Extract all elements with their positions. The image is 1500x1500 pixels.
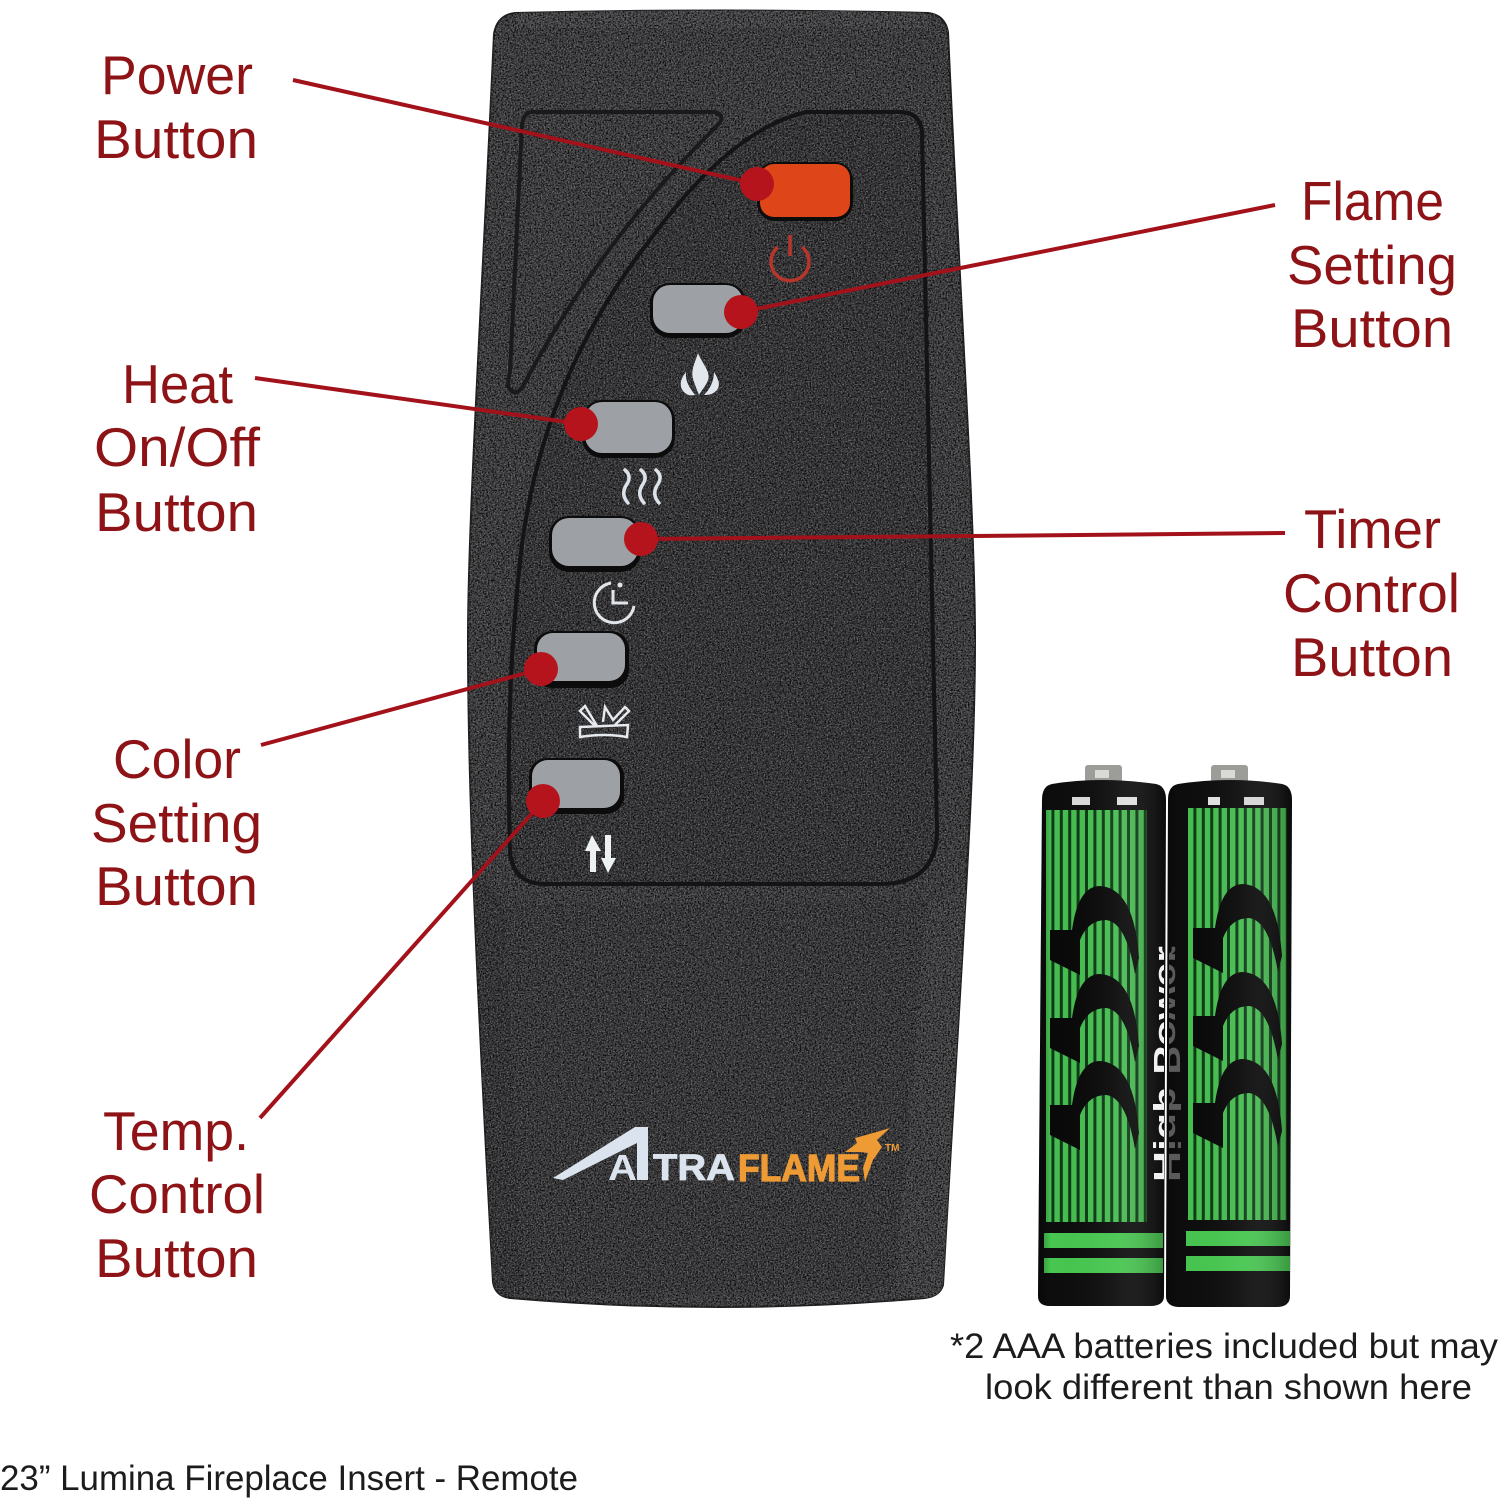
- callout: timer control button: [624, 498, 1460, 688]
- callout: temp control button: Control: [89, 1163, 265, 1225]
- callout: color setting button: [91, 652, 558, 917]
- callout: power button: Button: [94, 108, 258, 170]
- icon: timer clock: [594, 583, 634, 623]
- groove: triangular recess: [508, 112, 721, 393]
- callout: temp control button: Temp.: [103, 1100, 249, 1162]
- button: temp control: [529, 758, 624, 814]
- battery: left: High Power: [1147, 946, 1182, 1182]
- callout: timer control button: Button: [1291, 626, 1453, 688]
- button: heat on/off: [582, 400, 675, 458]
- callout: flame setting button: Setting: [1287, 234, 1457, 296]
- callout: color setting button: Color: [113, 728, 241, 790]
- battery note: [950, 1327, 1499, 1407]
- button: power: [757, 162, 853, 221]
- logo: AltraFlame: TRA: [653, 1147, 735, 1188]
- callout: temp control button: [89, 784, 560, 1289]
- icon: flame: [681, 353, 719, 395]
- callout: color setting button: Button: [95, 855, 258, 917]
- logo: AltraFlame: FLAME: [738, 1148, 860, 1190]
- callout: heat on/off button: Heat: [122, 353, 233, 415]
- callout: temp control button: Button: [95, 1227, 258, 1289]
- callout: color setting button: Setting: [91, 792, 262, 854]
- button: color setting: [534, 631, 629, 688]
- battery: right: High Power: [1152, 946, 1187, 1182]
- button panel outline: [509, 112, 937, 884]
- battery note: *2 AAA batteries included but may: [950, 1327, 1499, 1366]
- callout: power button: Power: [101, 44, 253, 106]
- callout: flame setting button: [724, 170, 1457, 359]
- battery: left: [1038, 765, 1166, 1306]
- logo: AltraFlame: [553, 1127, 899, 1190]
- logo: AltraFlame: TM: [885, 1143, 899, 1154]
- callout: heat on/off button: [94, 353, 598, 543]
- callout: timer control button: Control: [1283, 562, 1460, 624]
- callout: heat on/off button: On/Off: [94, 416, 261, 478]
- icon: heat waves: [624, 470, 660, 503]
- icon: up/down arrows: [585, 835, 616, 873]
- icon: color crown: [580, 706, 629, 737]
- callout: power button: [94, 44, 774, 201]
- callout: timer control button: Timer: [1304, 498, 1441, 560]
- logo: AltraFlame: A: [608, 1147, 637, 1188]
- callout: flame setting button: Flame: [1301, 170, 1444, 232]
- callout: heat on/off button: Button: [95, 481, 258, 543]
- battery note: look different than shown here: [985, 1368, 1472, 1407]
- caption: 23” Lumina Fireplace Insert - Remote: [0, 1459, 578, 1498]
- button: flame setting: [650, 283, 746, 338]
- icon: power: [771, 235, 809, 281]
- callout: flame setting button: Button: [1291, 297, 1453, 359]
- battery: right: [1152, 765, 1292, 1307]
- remote control body: [460, 0, 980, 1320]
- button: timer control: [549, 516, 641, 572]
